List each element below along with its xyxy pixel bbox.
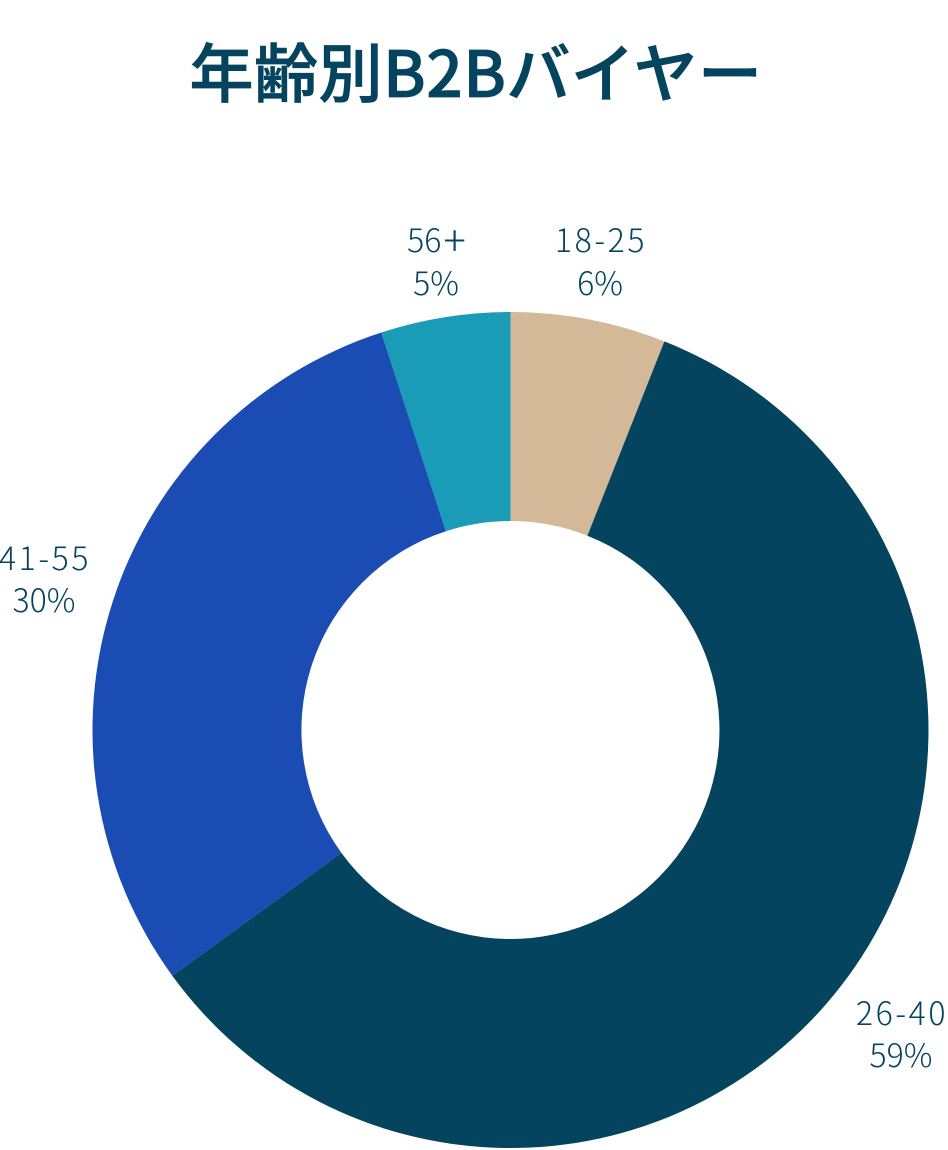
label: 18-25 6%: 6% [577,259,623,305]
title: 年齢別B2Bバイヤー [190,24,762,116]
label: 18-25 6% [555,216,647,305]
segment: 26-40 59% [172,341,928,1148]
label: 41-55 30% [0,534,91,622]
segment: 41-55 30% [92,332,446,976]
label: 56+ 5%: + [443,208,466,269]
label: 26-40 59%: 26-40 [856,989,948,1035]
segment: 18-25 6% [510,312,664,536]
label: 56+ 5%: 5% [413,259,459,305]
label: 26-40 59% [856,989,948,1077]
segment: 56+ 5% [381,312,510,531]
label: 41-55 30%: 41-55 [0,534,91,580]
label: 56+ 5% [407,208,466,305]
donut chart [92,312,928,1148]
label: 18-25 6%: 18-25 [555,216,647,262]
label: 56+ 5%: 56 [407,216,441,262]
label: 26-40 59%: 59% [870,1031,932,1077]
label: 41-55 30%: 30% [13,576,75,622]
